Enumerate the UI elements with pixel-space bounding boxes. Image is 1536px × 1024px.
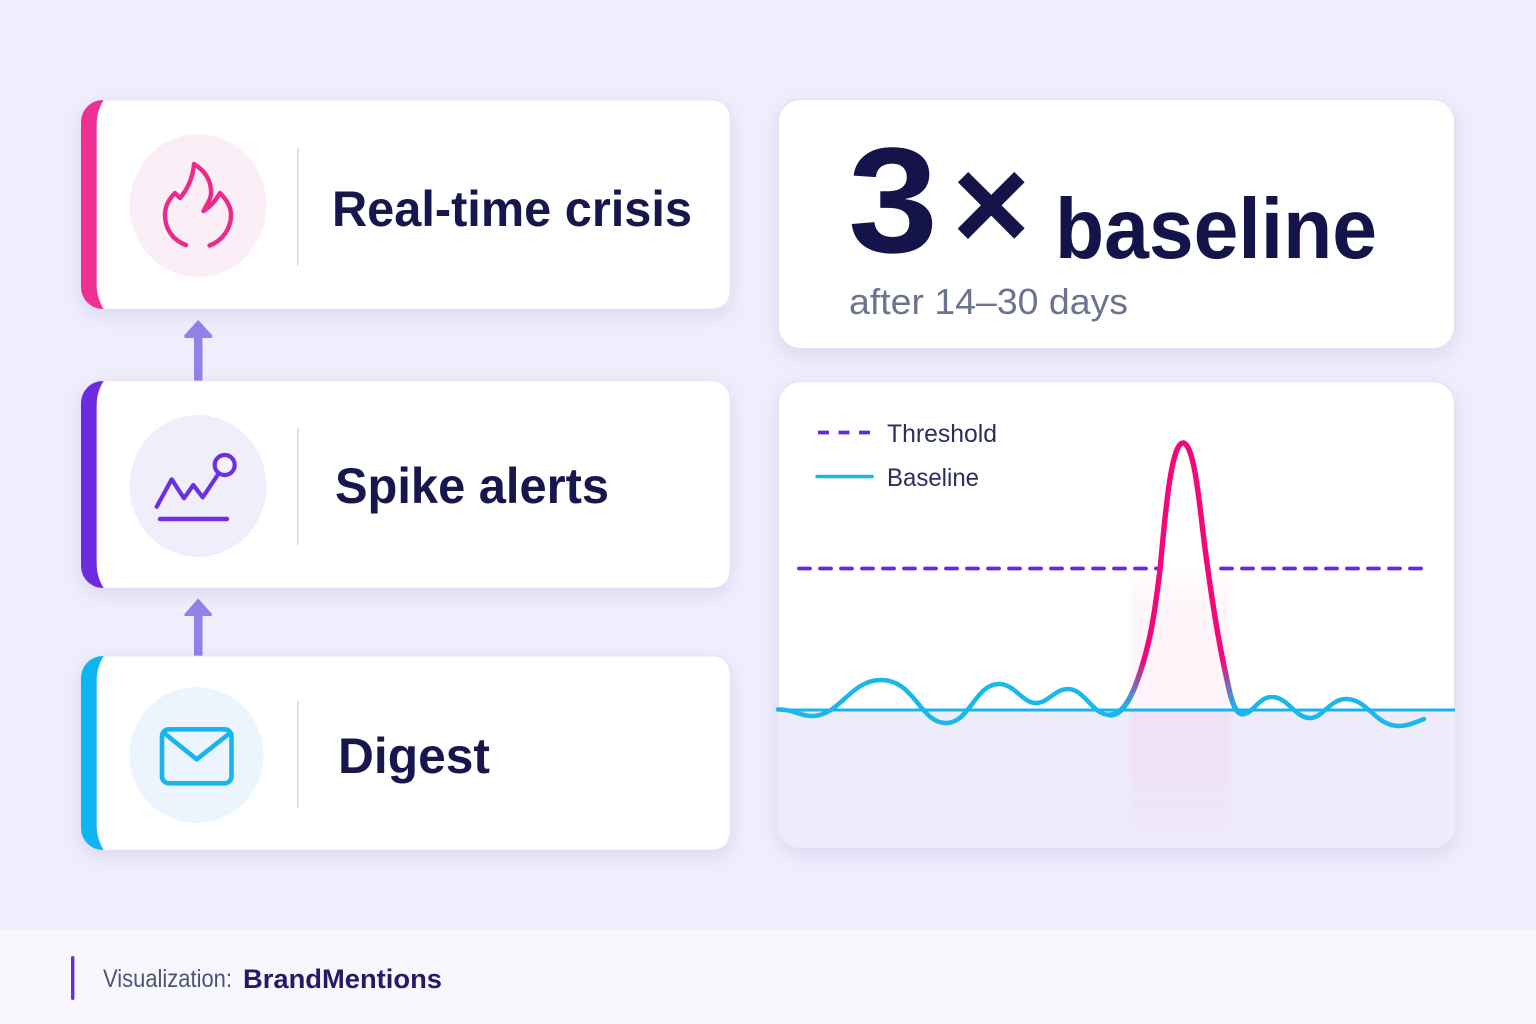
card body <box>81 656 730 850</box>
panel: real-time crisis <box>81 100 730 309</box>
footer <box>0 930 1536 1024</box>
card body <box>81 381 730 588</box>
stat unit: baseline <box>1055 182 1377 277</box>
spike signal <box>1110 443 1243 715</box>
panel: spike alerts <box>81 381 730 588</box>
stat number: 3 <box>848 116 938 284</box>
footer accent bar <box>71 956 74 1000</box>
label: real-time crisis: Real-time crisis <box>332 181 692 237</box>
chart card body <box>778 382 1454 848</box>
legend: Baseline <box>887 464 979 492</box>
label: spike alerts: Spike alerts <box>335 458 609 514</box>
baseline line <box>778 708 1455 712</box>
baseline signal right <box>1243 697 1424 726</box>
icon: envelope <box>130 687 264 823</box>
footer brand name: BrandMentions <box>243 964 442 994</box>
baseline signal left <box>778 680 1110 723</box>
icon: flame <box>130 134 266 277</box>
panel: spike chart <box>778 382 1455 848</box>
spike highlight band <box>1131 570 1231 838</box>
icon: spike chart <box>130 415 266 557</box>
panel: 3x baseline stat <box>778 100 1454 348</box>
label: digest: Digest <box>338 728 490 784</box>
panel: digest <box>81 656 730 850</box>
stat card body <box>778 100 1454 348</box>
card body <box>81 100 730 309</box>
multiplication sign: × <box>952 130 1030 279</box>
footer credit label: Visualization: <box>103 965 232 993</box>
arrow: digest to spike alerts <box>184 598 212 656</box>
arrow: spike alerts to real-time crisis <box>184 320 212 381</box>
stat caption: after 14–30 days <box>849 281 1128 322</box>
area below baseline <box>778 710 1455 848</box>
legend: Threshold <box>887 420 997 448</box>
legend <box>817 420 997 492</box>
threshold line <box>799 567 1423 570</box>
